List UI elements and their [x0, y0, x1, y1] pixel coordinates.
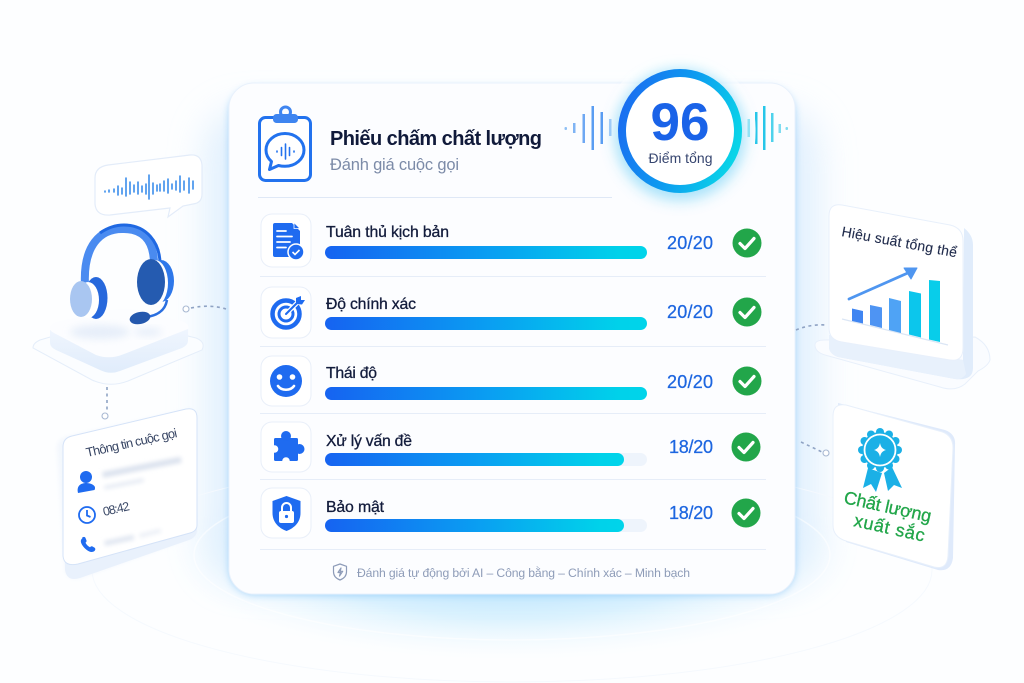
- score value: 96: [650, 93, 710, 152]
- blurred caller name: [102, 457, 182, 546]
- headband: [85, 229, 154, 285]
- waveform left of score: [564, 106, 612, 150]
- icon: shield lock: [261, 488, 311, 538]
- badge text: [842, 487, 933, 545]
- heading: [330, 128, 542, 174]
- row: Tuân thủ kịch bản: [261, 214, 762, 267]
- bar chart: [842, 280, 948, 345]
- icon: rosette: [858, 428, 902, 492]
- icon: person: [78, 471, 95, 493]
- microphone: [146, 300, 167, 317]
- score gauge: [604, 55, 756, 207]
- row: Độ chính xác: Độ chính xác: [326, 296, 416, 313]
- row divider: [260, 413, 766, 414]
- panel: excellent quality badge: [833, 403, 955, 570]
- icon: smiley: [261, 356, 311, 406]
- waveform right of score: [748, 106, 788, 150]
- row divider: [260, 276, 766, 277]
- platform: [815, 337, 990, 389]
- card depth: [829, 228, 973, 379]
- row: Tuân thủ kịch bản: 20/20: [667, 233, 713, 253]
- panel: overall performance: [815, 205, 990, 389]
- trend arrow: [849, 268, 917, 299]
- main card: [229, 83, 795, 595]
- connector: headset to call info: [102, 387, 108, 419]
- footer note: Đánh giá tự động bởi AI – Công bằng – Chính xác – Minh bạch: [357, 565, 690, 580]
- row: Thái độ: 20/20: [667, 372, 713, 392]
- row: Độ chính xác: 20/20: [667, 302, 713, 322]
- row: Bảo mật: [261, 488, 760, 538]
- icon: clock: [79, 507, 95, 523]
- panel title: Thông tin cuộc gọi: [84, 425, 178, 460]
- badge text: Chất lượng: [842, 487, 933, 526]
- panel: call info: [57, 409, 197, 579]
- right ear cup: [148, 260, 174, 302]
- score label: Điểm tổng: [648, 150, 712, 166]
- header divider: [258, 197, 612, 198]
- row: Độ chính xác: [261, 287, 762, 338]
- panel title: Hiệu suất tổng thể: [840, 223, 959, 260]
- headset on platform: [33, 225, 203, 384]
- row divider: [260, 479, 766, 480]
- icon: clipboard with speech bubble: [260, 107, 310, 180]
- connector: performance to card: [796, 325, 826, 330]
- icon: document check: [261, 214, 311, 267]
- row: Thái độ: Thái độ: [326, 365, 377, 382]
- row: Tuân thủ kịch bản: Tuân thủ kịch bản: [326, 224, 449, 241]
- connector: headset to card: [183, 306, 226, 312]
- row: Xử lý vấn đề: 18/20: [669, 437, 713, 457]
- row divider: [260, 549, 766, 550]
- row divider: [260, 346, 766, 347]
- icon: shield bolt: [334, 564, 346, 580]
- left ear cup: [84, 277, 108, 319]
- heading: Phiếu chấm chất lượng: [330, 128, 542, 150]
- icon: phone: [81, 537, 95, 552]
- platform base: [33, 318, 203, 384]
- card face: [829, 205, 963, 360]
- icon: puzzle piece: [261, 422, 311, 472]
- platform block: [50, 328, 188, 373]
- row: Xử lý vấn đề: Xử lý vấn đề: [326, 433, 412, 450]
- icon: target: [261, 287, 311, 338]
- row: Bảo mật: Bảo mật: [326, 499, 385, 516]
- speech bubble with waveform: [95, 155, 202, 217]
- row: Xử lý vấn đề: [261, 422, 760, 472]
- connector: badge to card: [801, 442, 829, 456]
- row: Thái độ: [261, 356, 762, 406]
- badge text: xuất sắc: [852, 509, 927, 545]
- call duration: 08:42: [102, 499, 131, 519]
- row: Bảo mật: 18/20: [669, 503, 713, 523]
- subheading: Đánh giá cuộc gọi: [330, 156, 459, 174]
